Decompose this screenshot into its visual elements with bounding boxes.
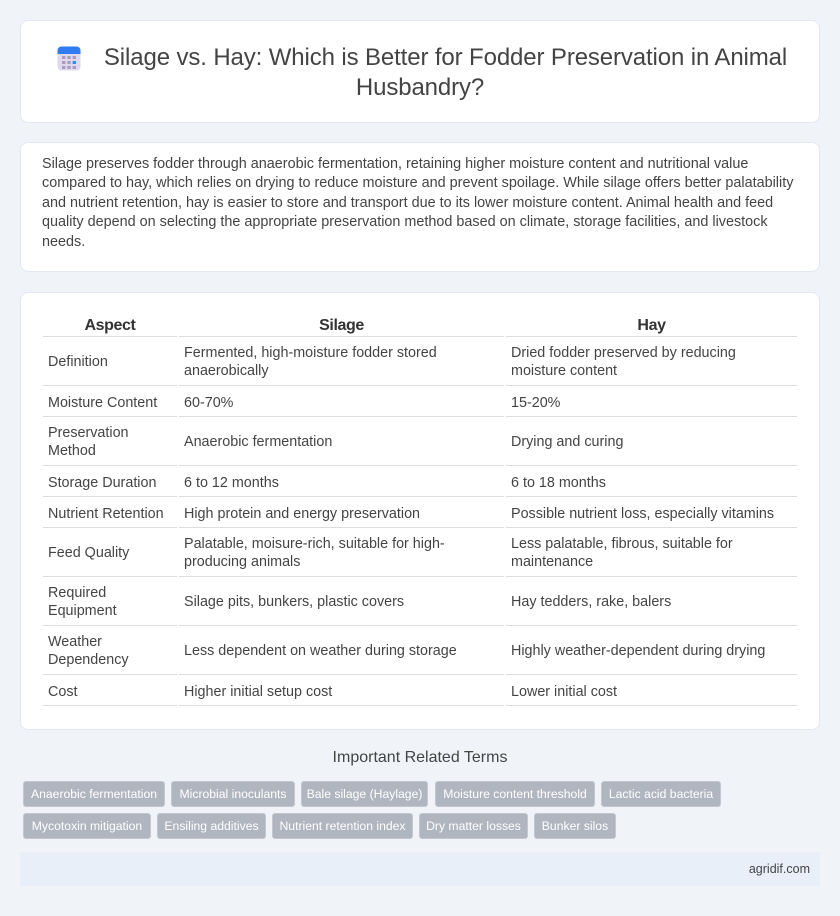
row: storage duration: 6 to 12 months [184,475,279,491]
row: weather dependency: Dependency [48,652,129,668]
tag [534,813,616,839]
tag: Anaerobic fermentation [31,787,157,801]
row: cost: Higher initial setup cost [184,684,332,700]
tag: Lactic acid bacteria [609,787,713,801]
row: nutrient retention [48,506,774,522]
row: nutrient retention: Possible nutrient loss, especially vitamins [511,506,774,522]
intro text: quality depend on selecting the appropriate preservation method based on climate, storage facilities, and livestock [42,214,768,230]
tag [23,781,165,807]
tag: Microbial inoculants [179,787,287,801]
tag [23,813,151,839]
row: required equipment: Equipment [48,603,117,619]
row: weather dependency: Weather [48,634,102,650]
tag: Nutrient retention index [279,819,406,833]
tag: Moisture content threshold [443,787,587,801]
tag [272,813,413,839]
row: definition: Definition [48,354,108,370]
row: moisture content: 15-20% [511,395,560,411]
row: cost: Lower initial cost [511,684,617,700]
title [104,44,787,101]
row: required equipment: Silage pits, bunkers, plastic covers [184,594,404,610]
row: required equipment: Hay tedders, rake, balers [511,594,671,610]
tag: Bunker silos [542,819,608,833]
row: weather dependency: Less dependent on weather during storage [184,643,457,659]
row: preservation method: Preservation [48,425,129,441]
footer source: agridif.com [749,862,810,876]
tag [171,781,295,807]
intro text: Silage preserves fodder through anaerobic fermentation, retaining higher moisture content and nutritional value [42,156,748,172]
intro text: and nutrient retention, hay is easier to store and transport due to its lower moisture content. Animal health and feed [42,195,773,211]
title: Silage vs. Hay: Which is Better for Fodder Preservation in Animal [104,44,787,71]
tag: Bale silage (Haylage) [307,787,422,801]
panel: introduction [20,142,820,272]
row: feed quality: Less palatable, fibrous, suitable for [511,536,733,552]
row: definition: Dried fodder preserved by reducing [511,345,736,361]
panel: title card [20,20,820,123]
table header [84,317,666,334]
row: definition [48,345,736,379]
row: moisture content: Moisture Content [48,395,157,411]
tags: related terms [23,781,721,839]
tag: Mycotoxin mitigation [32,819,142,833]
footer bar [20,852,820,886]
row: weather dependency: Highly weather-dependent during drying [511,643,765,659]
row: cost [48,684,617,700]
table header: Hay [637,317,666,334]
row: definition: anaerobically [184,363,269,379]
row: definition: moisture content [511,363,617,379]
row: preservation method: Method [48,443,96,459]
row: feed quality: producing animals [184,554,300,570]
row: storage duration: Storage Duration [48,475,156,491]
row: feed quality: Palatable, moisure-rich, suitable for high- [184,536,445,552]
intro text [42,156,794,250]
row: definition: Fermented, high-moisture fodder stored [184,345,437,361]
intro text: needs. [42,234,85,250]
row: nutrient retention: Nutrient Retention [48,506,164,522]
icon: calendar [58,46,80,70]
tag [435,781,595,807]
tag: Ensiling additives [164,819,259,833]
row: preservation method: Anaerobic fermentation [184,434,332,450]
tag: Dry matter losses [426,819,521,833]
row: required equipment [48,585,671,619]
row: feed quality: Feed Quality [48,545,129,561]
row: feed quality [48,536,733,570]
row: required equipment: Required [48,585,106,601]
panel: comparison table [20,292,820,730]
row: storage duration [48,475,606,491]
tag [601,781,721,807]
tag [301,781,428,807]
table header: Aspect [85,317,135,334]
tag [157,813,266,839]
row: nutrient retention: High protein and energy preservation [184,506,420,522]
row: moisture content: 60-70% [184,395,233,411]
row: preservation method: Drying and curing [511,434,623,450]
row: preservation method [48,425,623,459]
intro text: compared to hay, which relies on drying to reduce moisture and prevent spoilage. While silage offers better palatability [42,175,793,191]
title: Husbandry? [356,74,484,101]
tag [419,813,528,839]
row: cost: Cost [48,684,78,700]
row: storage duration: 6 to 18 months [511,475,606,491]
table header: Silage [319,317,364,334]
row: weather dependency [48,634,765,668]
heading: related terms: Important Related Terms [333,749,507,766]
row: feed quality: maintenance [511,554,593,570]
row: moisture content [48,395,560,411]
